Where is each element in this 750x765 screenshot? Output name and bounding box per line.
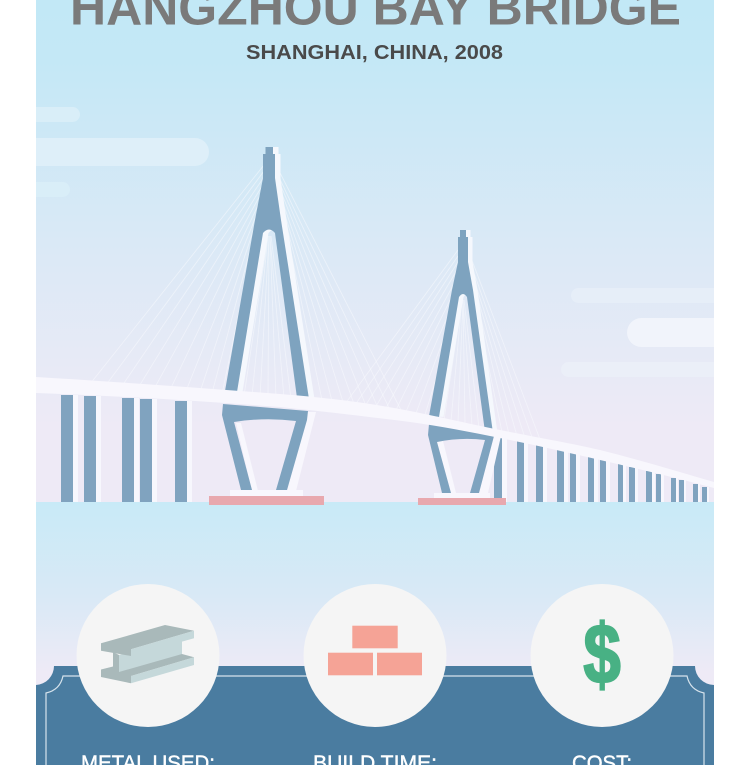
bridge cables <box>90 165 541 442</box>
circle: bricks <box>304 584 446 727</box>
large pylon base <box>209 404 324 505</box>
decorative inner border <box>46 676 704 765</box>
panel: sky background <box>36 0 714 503</box>
subtitle: SHANGHAI, CHINA, 2008 <box>246 42 503 64</box>
small pylon base <box>418 424 506 505</box>
circle: metal <box>76 584 220 727</box>
tower: small pylon <box>418 230 506 505</box>
left piers <box>61 395 192 502</box>
icon: steel i-beam <box>101 625 194 683</box>
icon: dollar sign: $ <box>583 608 621 702</box>
panel: water background <box>36 502 714 692</box>
icon: bricks <box>328 626 422 675</box>
clouds <box>36 107 714 377</box>
tower: large pylon <box>209 147 324 505</box>
panel: stats band <box>36 666 714 765</box>
right piers <box>494 434 709 502</box>
circle: cost <box>530 584 674 727</box>
bridge deck <box>36 377 714 488</box>
